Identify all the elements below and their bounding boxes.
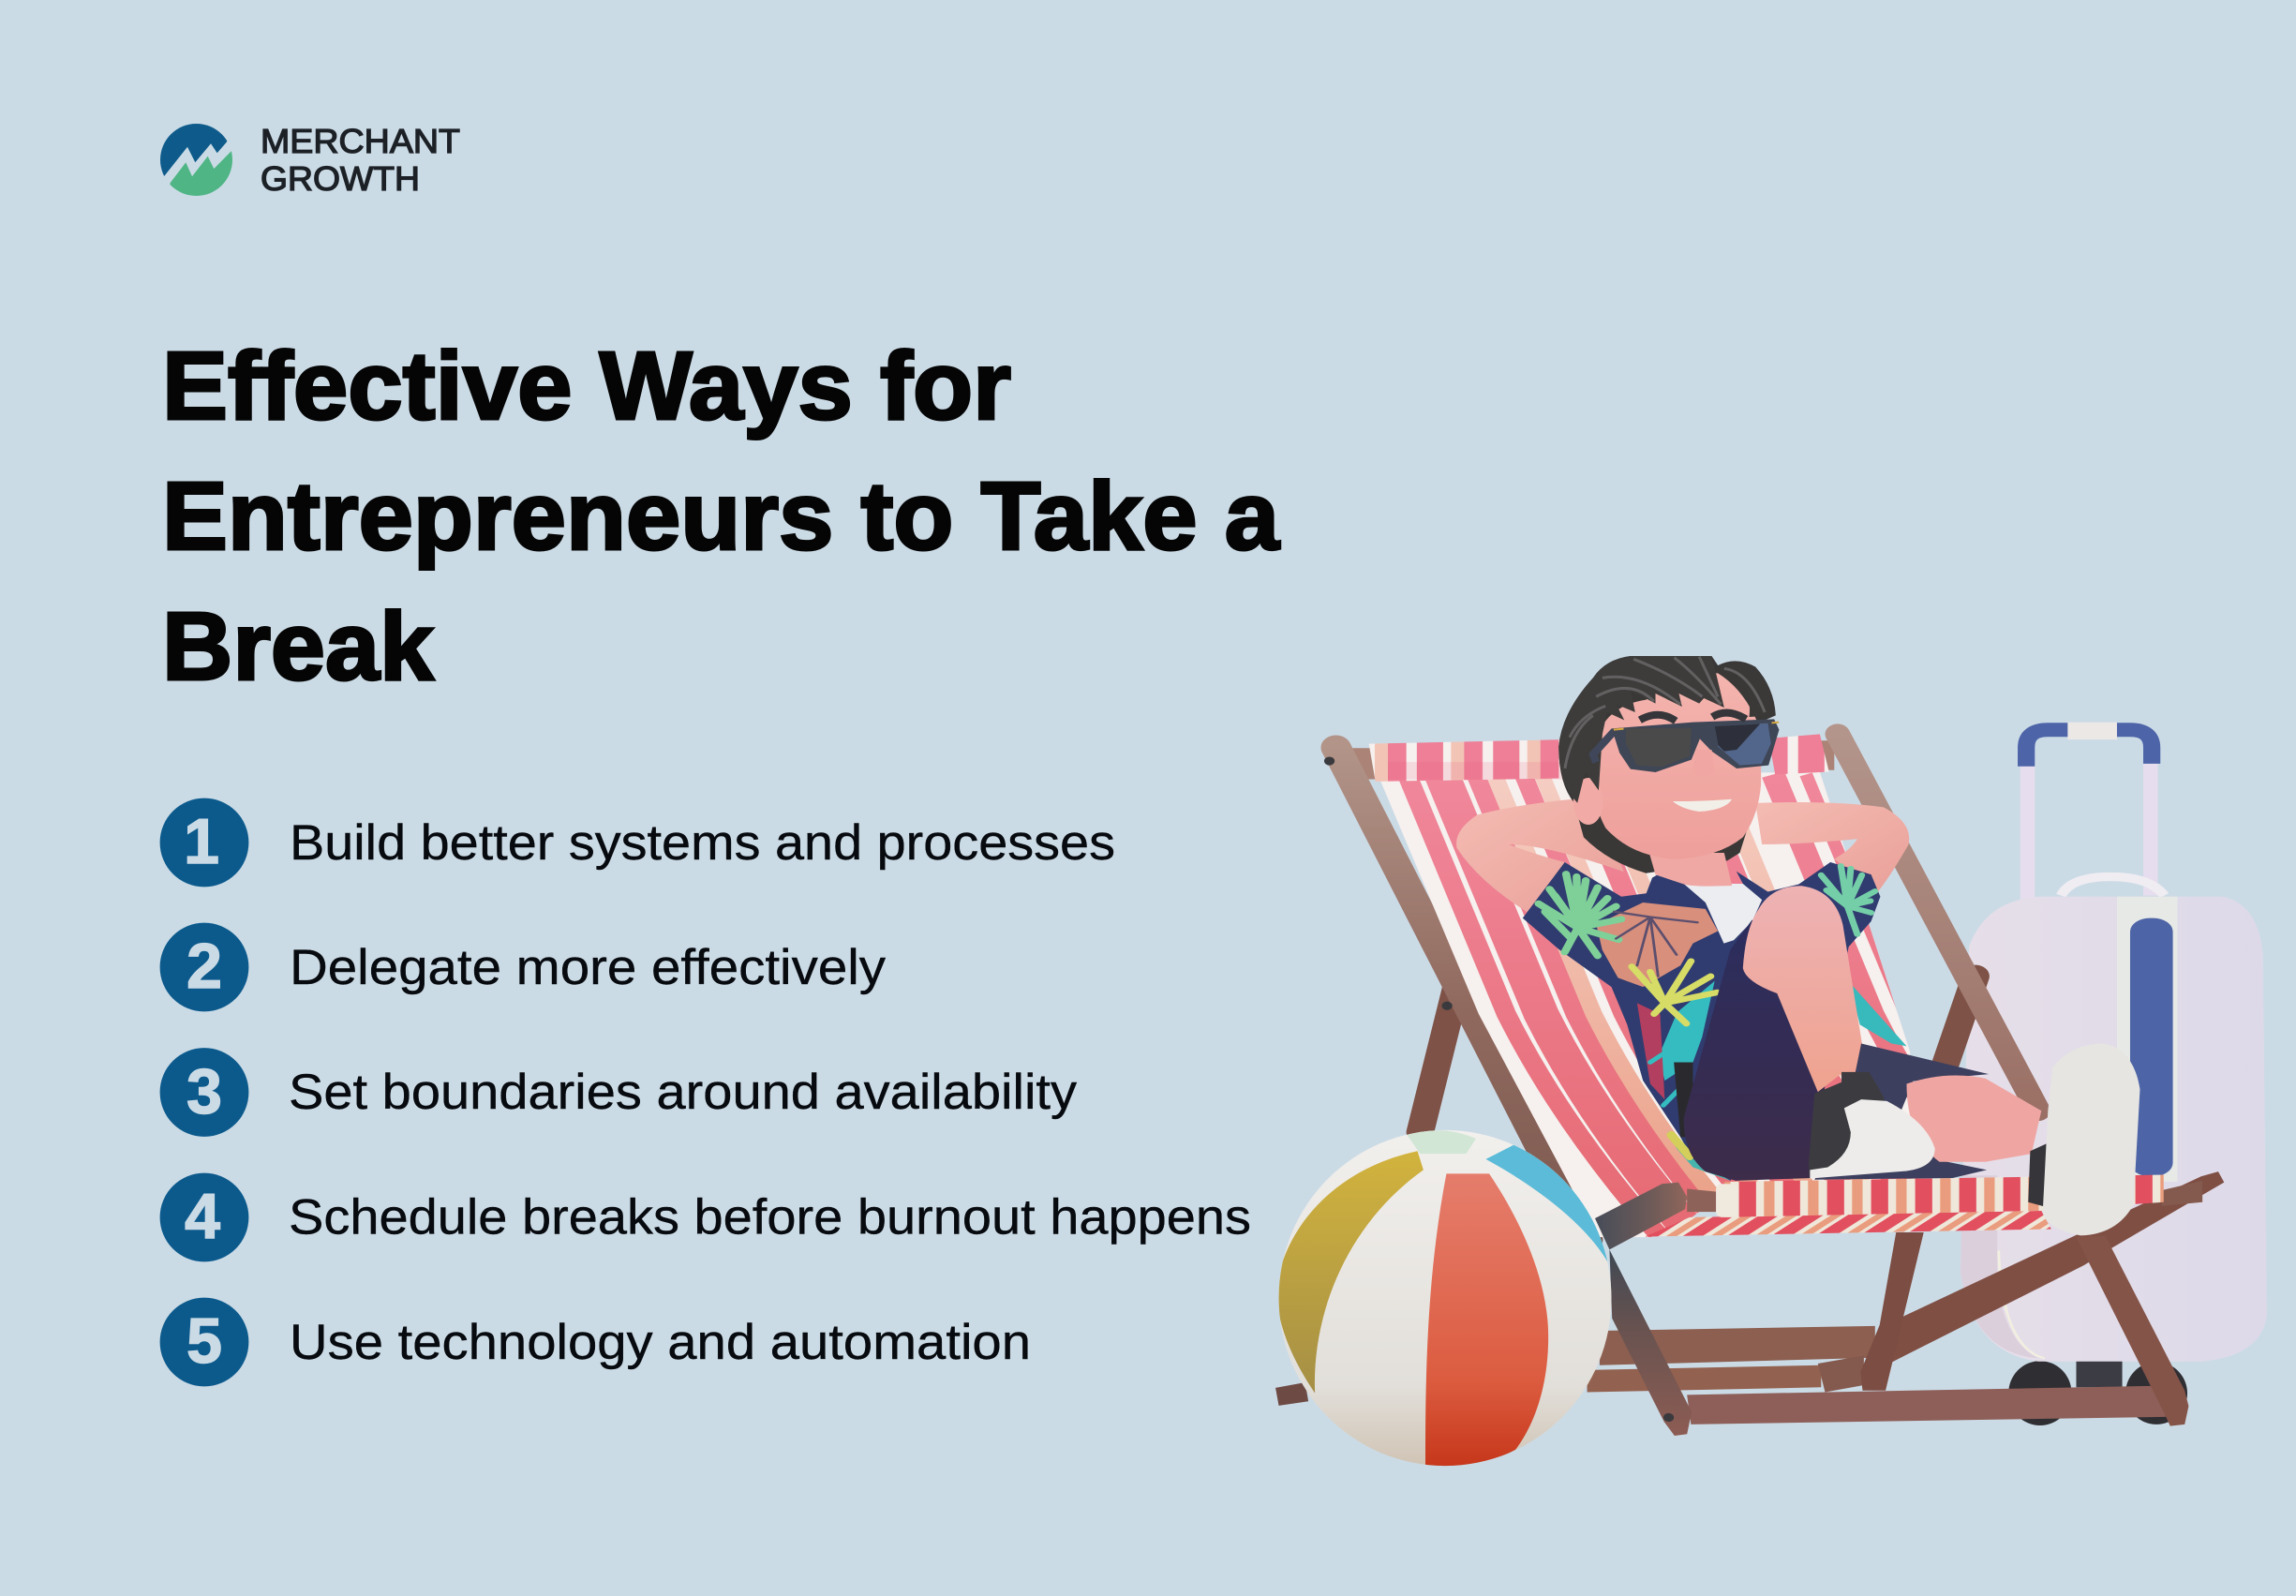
ear bbox=[1573, 778, 1603, 825]
tip 4 bbox=[160, 1173, 1251, 1261]
shirt: teal leaves bbox=[1659, 981, 1715, 1081]
smile bbox=[1673, 799, 1732, 812]
head group bbox=[1558, 656, 1779, 887]
chair fabric: back panel bbox=[1368, 734, 1919, 1237]
neck bbox=[1649, 853, 1732, 887]
beach ball bbox=[1275, 1126, 1618, 1471]
man bbox=[1456, 656, 2140, 1235]
title: Break bbox=[162, 592, 435, 700]
tip 4: Schedule breaks before burnout happens bbox=[289, 1190, 1251, 1245]
logo wordmark bbox=[261, 122, 460, 198]
tip 5: 5 bbox=[186, 1305, 222, 1377]
tip 3 bbox=[160, 1048, 1078, 1137]
shorts hem bbox=[1674, 1063, 1692, 1137]
list of five tips bbox=[160, 798, 1251, 1386]
nose bbox=[1692, 750, 1715, 776]
shirt with tropical print bbox=[1523, 862, 1906, 1181]
shirt: hem leaves bbox=[1668, 1130, 1730, 1181]
tip 2: Delegate more effectively bbox=[290, 940, 887, 995]
tip 1: 1 bbox=[184, 806, 219, 877]
extended leg bbox=[1906, 1076, 2041, 1162]
logo wordmark: MERCHANT bbox=[261, 122, 460, 160]
illustration: man relaxing on a beach chair bbox=[1275, 656, 2267, 1471]
shirt: coral palm bbox=[1596, 902, 1718, 987]
far shoe sole bbox=[2028, 1043, 2140, 1235]
shirt: maroon leaf bbox=[1637, 1003, 1664, 1099]
tip 5 bbox=[160, 1298, 1031, 1386]
tip 2 bbox=[160, 923, 887, 1011]
tip 5: Use technology and automation bbox=[290, 1315, 1031, 1370]
tip 2: 2 bbox=[186, 931, 222, 1002]
tip 3: Set boundaries around availability bbox=[289, 1065, 1078, 1120]
title: Entrepreneurs to Take a bbox=[162, 462, 1280, 570]
logo wordmark: GROWTH bbox=[261, 159, 420, 198]
title bbox=[162, 332, 1280, 700]
arms behind head bbox=[1456, 798, 1909, 912]
tip 1 bbox=[160, 798, 1115, 887]
title: Effective Ways for bbox=[162, 332, 1011, 440]
logo mark bbox=[160, 124, 232, 196]
raised leg bbox=[1743, 886, 1867, 1092]
tip 3: 3 bbox=[186, 1055, 222, 1126]
near shoe bbox=[1809, 1072, 1935, 1179]
tip 1: Build better systems and processes bbox=[290, 815, 1115, 871]
shirt: leaf strokes bbox=[1539, 866, 1875, 1156]
hair bangs bbox=[1558, 656, 1724, 803]
hair strands bbox=[1565, 657, 1765, 768]
chair seat fabric bbox=[1595, 1175, 2202, 1249]
sunglasses bbox=[1593, 713, 1779, 772]
face bbox=[1593, 673, 1761, 859]
tip 4: 4 bbox=[185, 1181, 220, 1252]
extended leg shorts bbox=[1814, 1043, 1989, 1180]
logo: Merchant Growth bbox=[160, 124, 460, 196]
chair frame: rear legs and rails bbox=[1275, 734, 2224, 1436]
raised thigh shorts bbox=[1684, 919, 1827, 1181]
hair back bbox=[1558, 656, 1776, 873]
white undershirt bbox=[1684, 884, 1762, 944]
shirt: lower right panel bbox=[1849, 981, 1906, 1046]
hair flip bbox=[1715, 662, 1775, 717]
suitcase bbox=[1961, 723, 2267, 1425]
